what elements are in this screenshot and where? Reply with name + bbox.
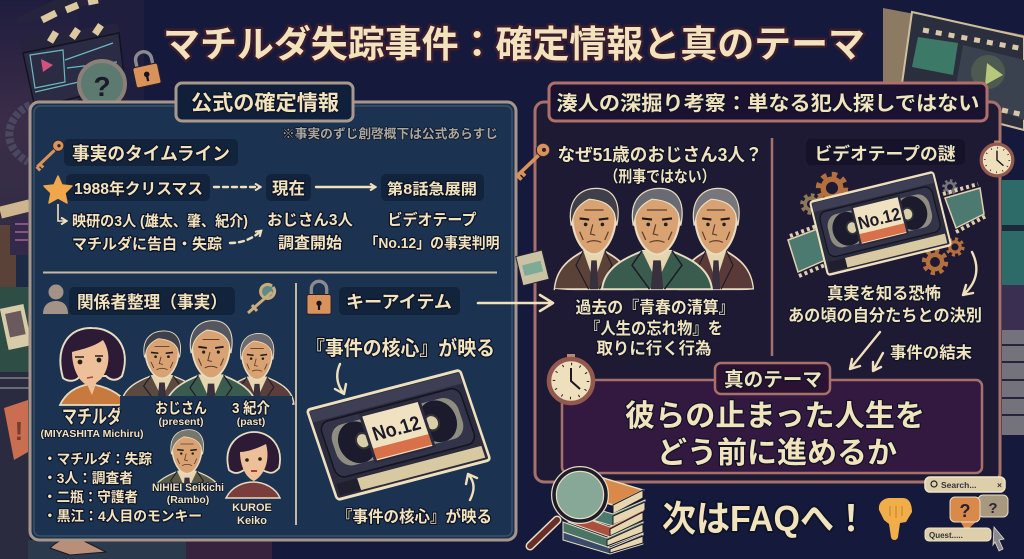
panel: deep analysis [516,83,1013,482]
video tape: No.12: No.12 [370,413,424,446]
timeline node: 1988 [66,174,210,201]
heading: timeline: 事実のタイムライン [72,144,230,164]
video tape with film and gears [788,172,986,276]
text: settling youth: 『人生の忘れ物』を [585,319,723,338]
list: people roles: ・3人：調査者 [43,470,133,486]
labels: men: 3 紀介 [232,400,270,417]
timeline node: present: 現在 [272,179,305,198]
labels: Nihei and Kuroe: (Rambo) [167,494,209,506]
icon: question magnifier: ? [93,71,111,102]
timeline node: episode 8 [381,174,484,201]
theme statement: 彼らの止まった人生を [625,400,925,433]
panel: official facts [30,83,516,540]
portraits: three men [554,188,760,296]
heading: key item [339,287,460,315]
arrow: key item to analysis [478,295,553,311]
text: fear of truth: 真実を知る恐怖 [827,283,941,303]
theme label: 真のテーマ [724,369,822,391]
video tape with film and gears: No.12 [856,204,903,234]
video tape: No.12 [307,370,490,500]
icon: antique key [248,284,275,313]
heading: why three men: なぜ51歳のおじさん3人？ [558,145,762,165]
text: settling youth: 過去の『青春の清算』 [576,297,734,317]
text: case conclusion: 事件の結末 [890,343,972,362]
icon: key [36,140,64,170]
arrow: star to detail [58,204,66,221]
icon: search window: × [997,480,1002,490]
text: videotape fact [364,210,500,252]
arrow: caption to tape [335,364,346,394]
icon: books and magnifier [530,469,645,554]
list: people roles [43,451,202,524]
icon: star [44,176,72,203]
icon: lock [307,281,331,314]
list: people roles: ・二瓶：守護者 [43,489,138,505]
icon: search window: Search... [941,480,976,490]
heading: key item: キーアイテム [346,292,452,312]
portrait: Nihei [148,430,226,499]
heading: people [69,287,235,315]
arrow: present to episode 8 [316,186,375,188]
icon: padlock top [130,49,161,88]
labels: Nihei and Kuroe: Keiko [237,515,267,527]
note: ※事実のずじ創啓概下は公式あらすじ [282,126,498,141]
decoration: warning note: ! [15,416,23,446]
decoration: warning note [4,400,28,460]
caption: bottom of tape: 『事件の核心』が映る [337,507,492,526]
heading: mystery of the videotape [806,139,965,165]
caption: top of tape: 『事件の核心』が映る [306,336,495,360]
panel heading: deep analysis [549,83,987,121]
text: three film club members: マチルダに告白・失踪 [72,235,222,253]
text: settling youth: 取りに行く行為 [596,339,712,358]
portrait: Matilda [60,328,128,405]
heading: why three men [558,145,762,186]
heading: people: 関係者整理（事実） [77,293,227,312]
decoration: left clapper [0,200,31,255]
labels: men: (present) [159,416,203,428]
portraits: three men [120,321,294,410]
labels: Nihei and Kuroe: NIHIEI Seikichi [152,482,224,494]
arrows: to true theme [850,332,883,371]
labels: Nihei and Kuroe [152,482,272,527]
theme statement [625,400,925,470]
text: videotape fact: 「No.12」の事実判明 [364,234,500,252]
icon: question magnifier [79,61,125,107]
timeline node: episode 8: 第8話急展開 [387,180,477,198]
decoration: polaroid photo [0,304,32,350]
theme statement: どう前に進めるか [657,437,897,470]
icon: search window: ? [988,500,998,517]
heading: timeline [64,139,238,166]
icon: person [43,284,68,314]
call to action: 次はFAQへ！ [662,498,868,539]
heading: why three men: （刑事ではない） [604,167,716,186]
label: Matilda: マチルダ [62,405,122,428]
list: people roles: ・マチルダ：失踪 [43,451,152,467]
timeline node: 1988: 1988年クリスマス [74,179,203,198]
text: investigation begins [267,211,353,252]
icon: search window: ? [960,501,970,521]
heading: mystery of the videotape: ビデオテープの謎 [814,144,956,164]
panel: true theme [562,363,982,473]
arrow: tape to fear [963,252,976,295]
panel heading: deep analysis: 湊人の深掘り考察：単なる犯人探しではない [556,92,980,115]
labels: men: おじさん [155,400,207,417]
label: Matilda [40,405,144,440]
arrow: caption to tape bottom [466,474,477,500]
label: Matilda: (MIYASHITA Michiru) [40,428,144,440]
icon: clapperboard [16,0,125,108]
timeline node: present [266,174,311,201]
panel heading: official facts: 公式の確定情報 [191,92,339,115]
icon: pointing hand [879,498,912,540]
labels: Nihei and Kuroe: KUROE [232,502,272,514]
text: settling youth [576,297,734,358]
decoration: film frame top right [883,8,1024,130]
arrow: dashed curve [230,231,261,243]
text: fear of truth [788,283,982,325]
text: investigation begins: おじさん3人 [267,211,353,229]
icon: search window [925,477,1008,551]
text: fear of truth: あの頃の自分たちとの決別 [788,305,982,325]
labels: men [155,400,270,428]
text: three film club members [72,212,248,253]
arrow: dashed to present [214,186,260,188]
icon: film reel left [9,105,30,162]
icon: note card [516,250,549,286]
panel heading: official facts [176,83,353,121]
icon: search window: Quest..... [929,531,963,540]
icon: stopwatch [549,354,593,403]
text: three film club members: 映研の3人 (雄太、肇、紀介) [72,212,248,230]
icon: stopwatch top right [981,141,1013,176]
labels: men: (past) [237,416,265,428]
list: people roles: ・黒江：4人目のモンキー [43,508,202,524]
title: マチルダ失踪事件：確定情報と真のテーマ [163,24,865,65]
portrait: Kuroe [226,432,280,498]
theme label [715,363,830,394]
text: videotape fact: ビデオテープ [388,210,477,229]
text: investigation begins: 調査開始 [278,234,343,252]
icon: key over panel edge [517,143,550,180]
